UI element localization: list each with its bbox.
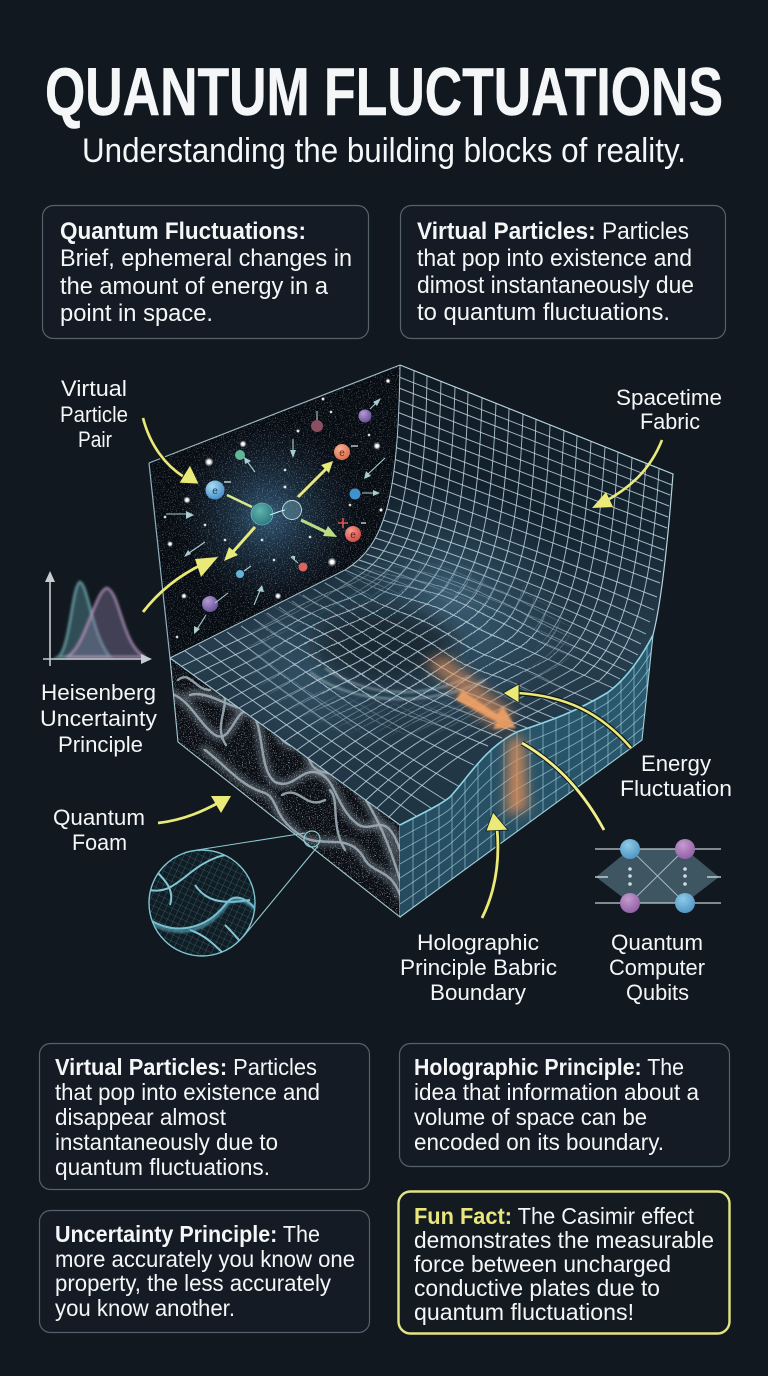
stars [163, 378, 391, 639]
panel: holographic boundary grid face [400, 630, 653, 920]
panel: holographic principle definition: idea that information about a [414, 1079, 699, 1105]
label: quantum foam: Foam [72, 830, 127, 855]
panel: fun fact callout: force between uncharged [414, 1251, 671, 1277]
energy fluctuation glow [425, 655, 528, 815]
label: quantum foam [53, 805, 145, 855]
label: energy fluctuation: Energy [641, 751, 711, 776]
panel: fun fact callout: conductive plates due to [414, 1275, 660, 1301]
panel: fun fact callout: quantum fluctuations! [414, 1299, 634, 1325]
panel: uncertainty principle definition: more accurately you know one [55, 1246, 355, 1272]
label: heisenberg uncertainty principle: Uncertainty [40, 706, 157, 731]
label: holographic principle boundary [400, 930, 557, 1005]
panel: virtual particles definition top [400, 206, 726, 338]
label: spacetime fabric: Fabric [640, 409, 700, 434]
label: energy fluctuation: Fluctuation [620, 776, 732, 801]
panel: uncertainty principle definition [40, 1210, 370, 1332]
subtitle: Understanding the building blocks of reality. [82, 132, 686, 170]
label: holographic principle boundary: Boundary [430, 980, 526, 1005]
panel: virtual particles definition bottom: disappear almost [55, 1104, 227, 1130]
arrow: energy fluctuation [503, 684, 631, 748]
label: spacetime fabric: Spacetime [616, 385, 722, 410]
arrow: quantum foam [158, 796, 231, 823]
panel: virtual particles definition bottom [40, 1044, 370, 1190]
particle pair arrows [224, 461, 337, 561]
icon: Heisenberg uncertainty curves [43, 571, 152, 666]
panel: fun fact callout [398, 1192, 730, 1334]
label: quantum computer qubits: Qubits [626, 980, 689, 1005]
panel: holographic principle definition: volume of space can be [414, 1104, 647, 1130]
label: quantum computer qubits: Quantum [611, 930, 703, 955]
panel: holographic principle definition: encoded on its boundary. [414, 1129, 664, 1155]
panel: uncertainty principle definition: you know another. [55, 1295, 235, 1321]
panel: virtual particles definition top: that pop into existence and [417, 245, 692, 272]
label: virtual particle pair: Virtual [61, 376, 127, 401]
label: holographic principle boundary: Principle Babric [400, 955, 557, 980]
panel: fun fact callout: Fun Fact: The Casimir effect [414, 1203, 695, 1229]
label: quantum computer qubits: Computer [609, 955, 705, 980]
panel: quantum fluctuations definition [42, 206, 368, 338]
label: heisenberg uncertainty principle: Heisenberg [41, 680, 156, 705]
panel: quantum fluctuations definition: point in space. [60, 300, 213, 327]
panel: virtual particles definition top: to quantum fluctuations. [417, 299, 670, 326]
label: spacetime fabric [616, 385, 722, 434]
panel: quantum fluctuations definition: Quantum Fluctuations: [60, 218, 306, 245]
label: quantum foam: Quantum [53, 805, 145, 830]
panel: fun fact callout: demonstrates the measurable [414, 1227, 714, 1253]
arrow: quantum computer qubits [522, 743, 604, 830]
panel: uncertainty principle definition: property, the less accurately [55, 1270, 331, 1296]
panel: virtual particles definition bottom: quantum fluctuations. [55, 1154, 270, 1180]
arrow: spacetime fabric [592, 440, 662, 508]
arrow: heisenberg uncertainty [143, 557, 218, 612]
label: energy fluctuation [620, 751, 732, 801]
particles: e [212, 486, 218, 497]
particles: e [339, 448, 345, 459]
arrow: virtual particle pair [143, 418, 199, 484]
panel: virtual particle space wall [149, 365, 404, 660]
arrow: holographic principle [482, 812, 508, 918]
panel: quantum fluctuations definition: the amount of energy in a [60, 273, 329, 300]
label: virtual particle pair: Particle [60, 402, 128, 427]
label: heisenberg uncertainty principle [40, 680, 157, 757]
label: virtual particle pair: Pair [78, 427, 112, 452]
spacetime fabric grid sheet [150, 360, 680, 830]
panel: virtual particles definition bottom: Virtual Particles: Particles [55, 1054, 317, 1080]
panel: quantum foam cross-section [170, 655, 402, 920]
panel: holographic principle definition [400, 1044, 730, 1166]
panel: virtual particles definition top: Virtual Particles: Particles [417, 218, 689, 245]
label: heisenberg uncertainty principle: Principle [58, 732, 143, 757]
panel: virtual particles definition top: dimost instantaneously due [417, 272, 694, 299]
label: holographic principle boundary: Holographic [417, 930, 539, 955]
particles [202, 410, 372, 612]
small drift arrows [166, 398, 385, 634]
panel: virtual particles definition bottom: that pop into existence and [55, 1079, 320, 1105]
particles: e [350, 530, 356, 541]
icon: foam magnifier [149, 831, 320, 960]
panel: virtual particles definition bottom: instantaneously due to [55, 1129, 278, 1155]
panel: quantum fluctuations definition: Brief, ephemeral changes in [60, 245, 352, 272]
label: virtual particle pair [60, 376, 128, 452]
panel: uncertainty principle definition: Uncertainty Principle: The [55, 1221, 320, 1247]
panel: holographic principle definition: Holographic Principle: The [414, 1054, 684, 1080]
icon: qubit diagram [595, 839, 721, 913]
label: quantum computer qubits [609, 930, 705, 1005]
